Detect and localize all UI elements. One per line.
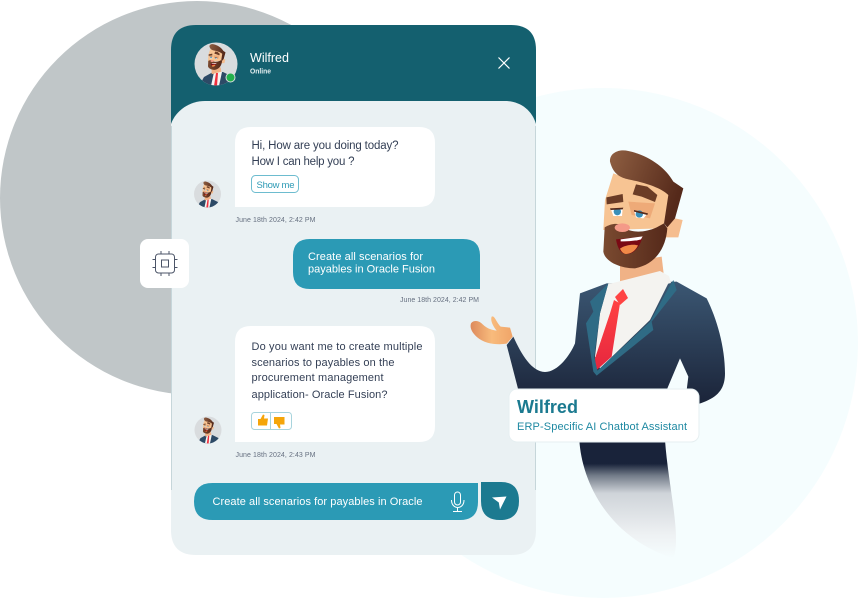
lapels: [586, 280, 677, 376]
message bubble: greeting: How I can help you ?: [252, 156, 354, 168]
shirt: [595, 280, 670, 368]
button: send: [481, 482, 519, 520]
avatar: header with online dot: [194, 42, 238, 86]
icon: microphone: [452, 492, 464, 512]
button: show me: [252, 176, 298, 192]
icon: close: [498, 58, 510, 68]
message bubble: question: application- Oracle Fusion?: [252, 389, 388, 401]
suit lower fade: [579, 440, 676, 558]
character body: [471, 280, 725, 558]
message bubble: question: procurement management: [252, 372, 384, 384]
name label card: Wilfred: [517, 396, 578, 417]
message bubble: user request: Create all scenarios for: [308, 251, 423, 263]
name label card: [509, 389, 699, 442]
panel: chat window: [171, 25, 536, 555]
character head: [603, 150, 683, 288]
chat header: [171, 25, 536, 140]
input field: Create all scenarios for payables in Oracle: [212, 496, 422, 508]
hand: [471, 316, 513, 344]
avatar: question: [194, 416, 222, 444]
background: gray circle: [0, 1, 394, 395]
avatar: greeting: [194, 180, 221, 208]
background: pale circle: [348, 88, 858, 598]
name label card: ERP-Specific AI Chatbot Assistant: [517, 421, 687, 433]
timestamp: June 18th 2024, 2:42 PM: [400, 297, 479, 304]
message bubble: user request: payables in Oracle Fusion: [308, 264, 435, 276]
header status: Online: [250, 68, 271, 76]
character: Wilfred: [471, 150, 725, 558]
message bubble: question: [235, 326, 435, 442]
tie: [595, 300, 620, 371]
input field: [194, 483, 478, 520]
collar: [609, 271, 671, 297]
timestamp: June 18th 2024, 2:43 PM: [236, 452, 316, 459]
icons: thumbs up and down: [252, 412, 292, 430]
icon: processor chip card: [140, 239, 189, 288]
message bubble: question: scenarios to payables on the: [252, 357, 394, 369]
header name: Wilfred: [250, 50, 289, 65]
message bubble: greeting: [235, 127, 435, 207]
button: show me: Show me: [256, 180, 294, 191]
tie knot: [615, 289, 628, 305]
message bubble: greeting: Hi, How are you doing today?: [252, 140, 398, 152]
timestamp: June 18th 2024, 2:42 PM: [236, 217, 316, 224]
message bubble: user request: [293, 239, 480, 289]
chat body: [171, 101, 536, 555]
suit jacket and arm: [507, 282, 725, 404]
message bubble: question: Do you want me to create multiple: [252, 341, 422, 353]
